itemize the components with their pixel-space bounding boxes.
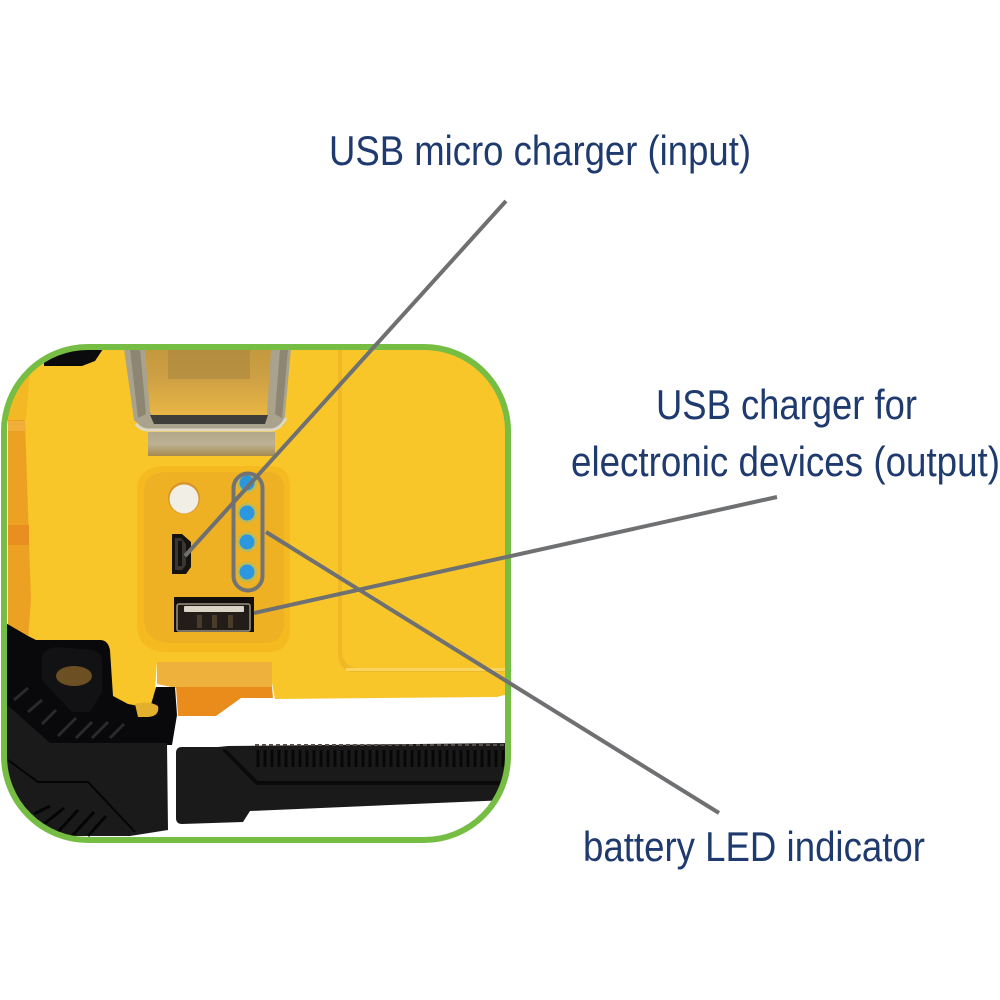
label: battery LED indicator: battery LED indicator [583,823,925,870]
icon: micro USB port [172,534,191,574]
icon: ratcheted handle [176,743,508,824]
label: USB charger for devices: USB charger for [656,381,917,428]
infographic [1,134,998,870]
icon: black bracket and handle base [4,622,177,836]
product photo [4,348,508,836]
arrow: to battery LEDs [266,532,719,813]
icon: power button [168,482,200,514]
icon: latch hinge [148,432,275,456]
arrow: to USB output port [254,497,777,613]
icon: transparent latch window [124,349,291,431]
label: USB micro charger: USB micro charger (input) [329,127,751,174]
arrow: to USB micro port [185,201,506,556]
rounded green frame [4,347,508,840]
LED highlight capsule [234,474,262,590]
panel: control recess [137,466,290,652]
panel: charger body [4,348,508,716]
icon: USB A port [174,597,254,632]
label: USB charger for devices [571,381,1000,485]
icon: battery LEDs [237,473,257,582]
